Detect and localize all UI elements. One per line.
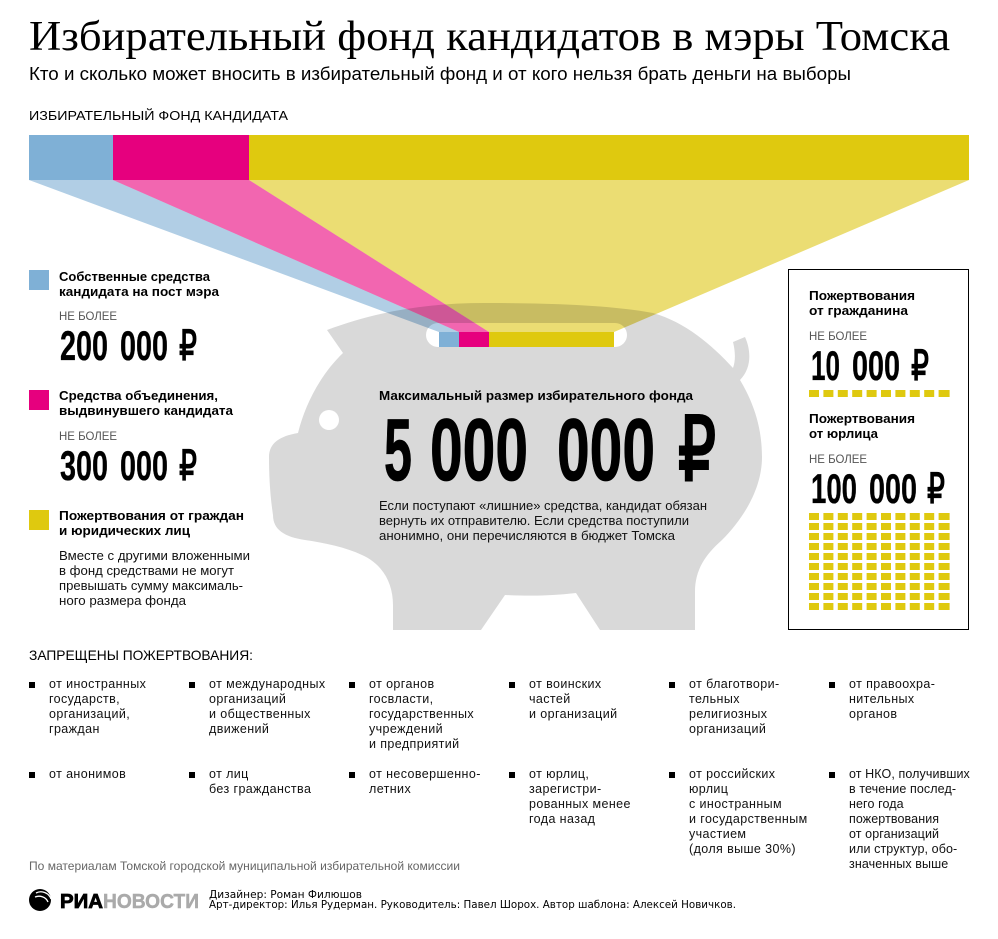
logo: RIA Novosti: РИА: [60, 891, 103, 913]
funnels from the bar to the slot: [29, 180, 969, 332]
legend: donations: и юридических лиц: [59, 523, 190, 538]
list: forbidden donors: и организаций: [529, 707, 618, 721]
callout: maximum fund size: [379, 388, 716, 543]
panel: donation limits: [788, 270, 968, 630]
panel: donation limits: ₽: [911, 342, 929, 389]
small stacked bar in slot: [439, 332, 614, 347]
legend: party funds: ₽: [179, 442, 197, 489]
list: forbidden donors: от несовершенно-: [369, 767, 481, 781]
legend: donations: [29, 508, 250, 608]
panel: donation limits: НЕ БОЛЕЕ: [809, 329, 867, 343]
list: forbidden donors: частей: [529, 692, 571, 706]
legend: own funds: ₽: [179, 322, 197, 369]
legend: own funds: 000: [120, 322, 168, 369]
list: forbidden donors: от НКО, получивших: [849, 767, 971, 781]
legend: own funds: НЕ БОЛЕЕ: [59, 309, 117, 323]
list: forbidden donors: и государственным: [689, 812, 808, 826]
list: forbidden donors: зарегистри-: [529, 782, 602, 796]
legend: party funds: выдвинувшего кандидата: [59, 403, 234, 418]
list: forbidden donors: от международных: [209, 677, 326, 691]
callout: maximum fund size: анонимно, они перечисляются в бюджет Томска: [379, 529, 675, 543]
logo: RIA Novosti: НОВОСТИ: [103, 891, 199, 913]
panel: donation limits: НЕ БОЛЕЕ: [809, 452, 867, 466]
list: forbidden donors: пожертвования: [849, 812, 939, 826]
list: forbidden donors: рованных менее: [529, 797, 631, 811]
list: forbidden donors: государств,: [49, 692, 120, 706]
piggy bank: [269, 303, 762, 630]
credits: [209, 888, 736, 911]
list: forbidden donors: граждан: [49, 722, 100, 736]
list: forbidden donors: летних: [369, 782, 411, 796]
list: forbidden donors: без гражданства: [209, 782, 311, 796]
list: forbidden donors: [29, 677, 971, 871]
legend: donations: Пожертвования от граждан: [59, 508, 244, 523]
unit squares: citizen: [809, 390, 950, 397]
list: forbidden donors: от лиц: [209, 767, 249, 781]
panel: donation limits: Пожертвования: [809, 288, 915, 303]
list: forbidden donors: участием: [689, 827, 746, 841]
panel: donation limits: Пожертвования: [809, 411, 915, 426]
callout: maximum fund size: Если поступают «лишние» средства, кандидат обязан: [379, 499, 707, 513]
credits: Дизайнер: Роман Филюшов: [209, 888, 362, 901]
list: forbidden donors: с иностранным: [689, 797, 782, 811]
list: forbidden donors: организаций: [689, 722, 766, 736]
list: forbidden donors: от организаций: [849, 827, 939, 841]
list: forbidden donors: от органов: [369, 677, 435, 691]
list: forbidden donors: или структур, обо-: [849, 842, 957, 856]
list: forbidden donors: от юрлиц,: [529, 767, 589, 781]
legend: party funds: [29, 388, 234, 489]
list: forbidden donors: (доля выше 30%): [689, 842, 796, 856]
legend: party funds: 000: [120, 442, 168, 489]
legend: donations: Вместе с другими вложенными: [59, 549, 250, 563]
list: forbidden donors: юрлиц: [689, 782, 728, 796]
callout: maximum fund size: ₽: [678, 400, 716, 499]
legend: own funds: 200: [60, 322, 108, 369]
list: forbidden donors: движений: [209, 722, 269, 736]
legend: donations: ного размера фонда: [59, 594, 186, 608]
legend: party funds: НЕ БОЛЕЕ: [59, 429, 117, 443]
forbidden donations heading: ЗАПРЕЩЕНЫ ПОЖЕРТВОВАНИЯ:: [29, 647, 253, 663]
list: forbidden donors: в течение послед-: [849, 782, 956, 796]
callout: maximum fund size: Максимальный размер избирательного фонда: [379, 388, 694, 403]
panel: donation limits: 000: [852, 342, 900, 389]
logo: RIA Novosti: [29, 889, 199, 913]
credits: Арт-директор: Илья Рудерман. Руководитель: Павел Шорох. Автор шаблона: Алексей Новичков.: [209, 898, 736, 911]
callout: maximum fund size: 5: [384, 400, 412, 499]
list: forbidden donors: него года: [849, 797, 904, 811]
legend: own funds: Собственные средства: [59, 269, 211, 284]
list: forbidden donors: организаций: [209, 692, 286, 706]
list: forbidden donors: от правоохра-: [849, 677, 935, 691]
legend: party funds: Средства объединения,: [59, 388, 218, 403]
list: forbidden donors: года назад: [529, 812, 596, 826]
coin slot: [426, 323, 627, 347]
list: forbidden donors: органов: [849, 707, 897, 721]
legend: party funds: 300: [60, 442, 108, 489]
list: forbidden donors: государственных: [369, 707, 474, 721]
legend: donations: в фонд средствами не могут: [59, 564, 234, 578]
list: forbidden donors: госвласти,: [369, 692, 434, 706]
callout: maximum fund size: 000: [430, 400, 528, 499]
subtitle: Кто и сколько может вносить в избирательный фонд и от кого нельзя брать деньги на выборы: [29, 64, 851, 84]
list: forbidden donors: от иностранных: [49, 677, 147, 691]
stacked bar heading: ИЗБИРАТЕЛЬНЫЙ ФОНД КАНДИДАТА: [29, 108, 288, 123]
callout: maximum fund size: вернуть их отправителю. Если средства поступили: [379, 514, 689, 528]
list: forbidden donors: учреждений: [369, 722, 443, 736]
panel: donation limits: ₽: [927, 465, 945, 512]
list: forbidden donors: организаций,: [49, 707, 130, 721]
panel: donation limits: 000: [869, 465, 917, 512]
legend: own funds: [29, 269, 220, 369]
callout: maximum fund size: 000: [557, 400, 655, 499]
panel: donation limits: от юрлица: [809, 426, 879, 441]
list: forbidden donors: от российских: [689, 767, 776, 781]
list: forbidden donors: религиозных: [689, 707, 768, 721]
list: forbidden donors: от воинских: [529, 677, 602, 691]
legend: donations: превышать сумму максималь-: [59, 579, 243, 593]
list: forbidden donors: от благотвори-: [689, 677, 780, 691]
unit squares: legal entity: [809, 513, 950, 610]
list: forbidden donors: тельных: [689, 692, 740, 706]
panel: donation limits: 10: [811, 342, 840, 389]
title: Избирательный фонд кандидатов в мэры Томска: [29, 14, 950, 60]
stacked bar: fund composition: [29, 135, 969, 180]
list: forbidden donors: значенных выше: [849, 857, 948, 871]
list: forbidden donors: нительных: [849, 692, 915, 706]
panel: donation limits: 100: [811, 465, 857, 512]
source note: По материалам Томской городской муниципальной избирательной комиссии: [29, 859, 460, 873]
legend: own funds: кандидата на пост мэра: [59, 284, 220, 299]
list: forbidden donors: и общественных: [209, 707, 311, 721]
list: forbidden donors: и предприятий: [369, 737, 460, 751]
list: forbidden donors: от анонимов: [49, 767, 126, 781]
panel: donation limits: от гражданина: [809, 303, 909, 318]
icon: pig eye: [319, 410, 339, 430]
